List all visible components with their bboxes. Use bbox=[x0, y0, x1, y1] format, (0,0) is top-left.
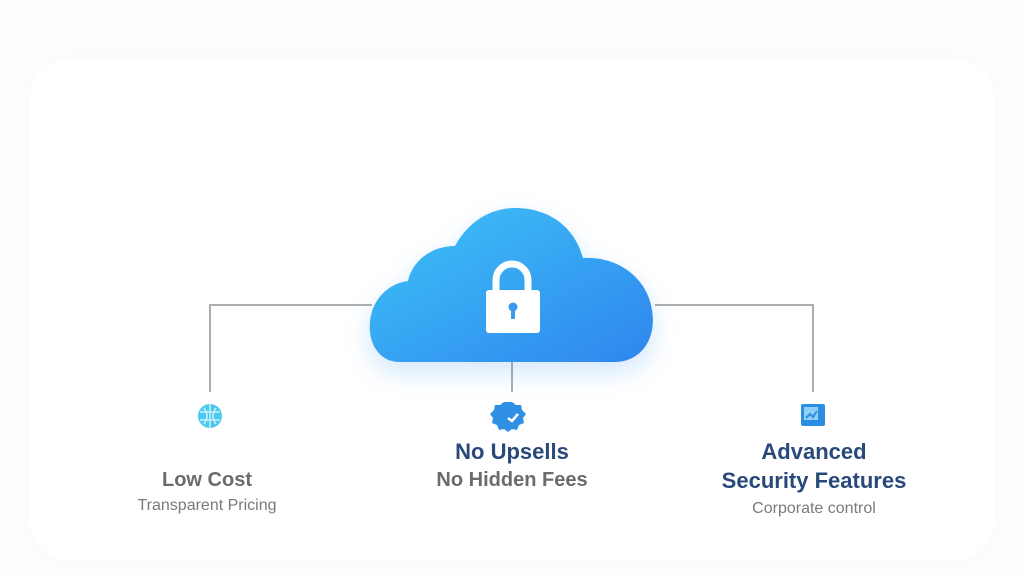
item: no upsells: No Hidden Fees bbox=[436, 469, 588, 491]
item: no upsells bbox=[436, 439, 588, 491]
item: security: Corporate control bbox=[752, 500, 876, 517]
item: security bbox=[722, 439, 906, 517]
icon: badge bbox=[490, 402, 526, 432]
item: security: Security Features bbox=[722, 468, 906, 493]
lock bbox=[486, 264, 540, 333]
item: low cost bbox=[137, 469, 277, 514]
item: no upsells: No Upsells bbox=[455, 439, 569, 464]
item: security: Advanced bbox=[761, 439, 867, 464]
icon: globe bbox=[198, 404, 222, 428]
connector lines bbox=[210, 305, 813, 392]
item: low cost: Transparent Pricing bbox=[137, 497, 277, 514]
item: low cost: Low Cost bbox=[162, 469, 252, 491]
icon: cloud with lock bbox=[370, 208, 653, 362]
icon: monitor bbox=[801, 404, 825, 426]
